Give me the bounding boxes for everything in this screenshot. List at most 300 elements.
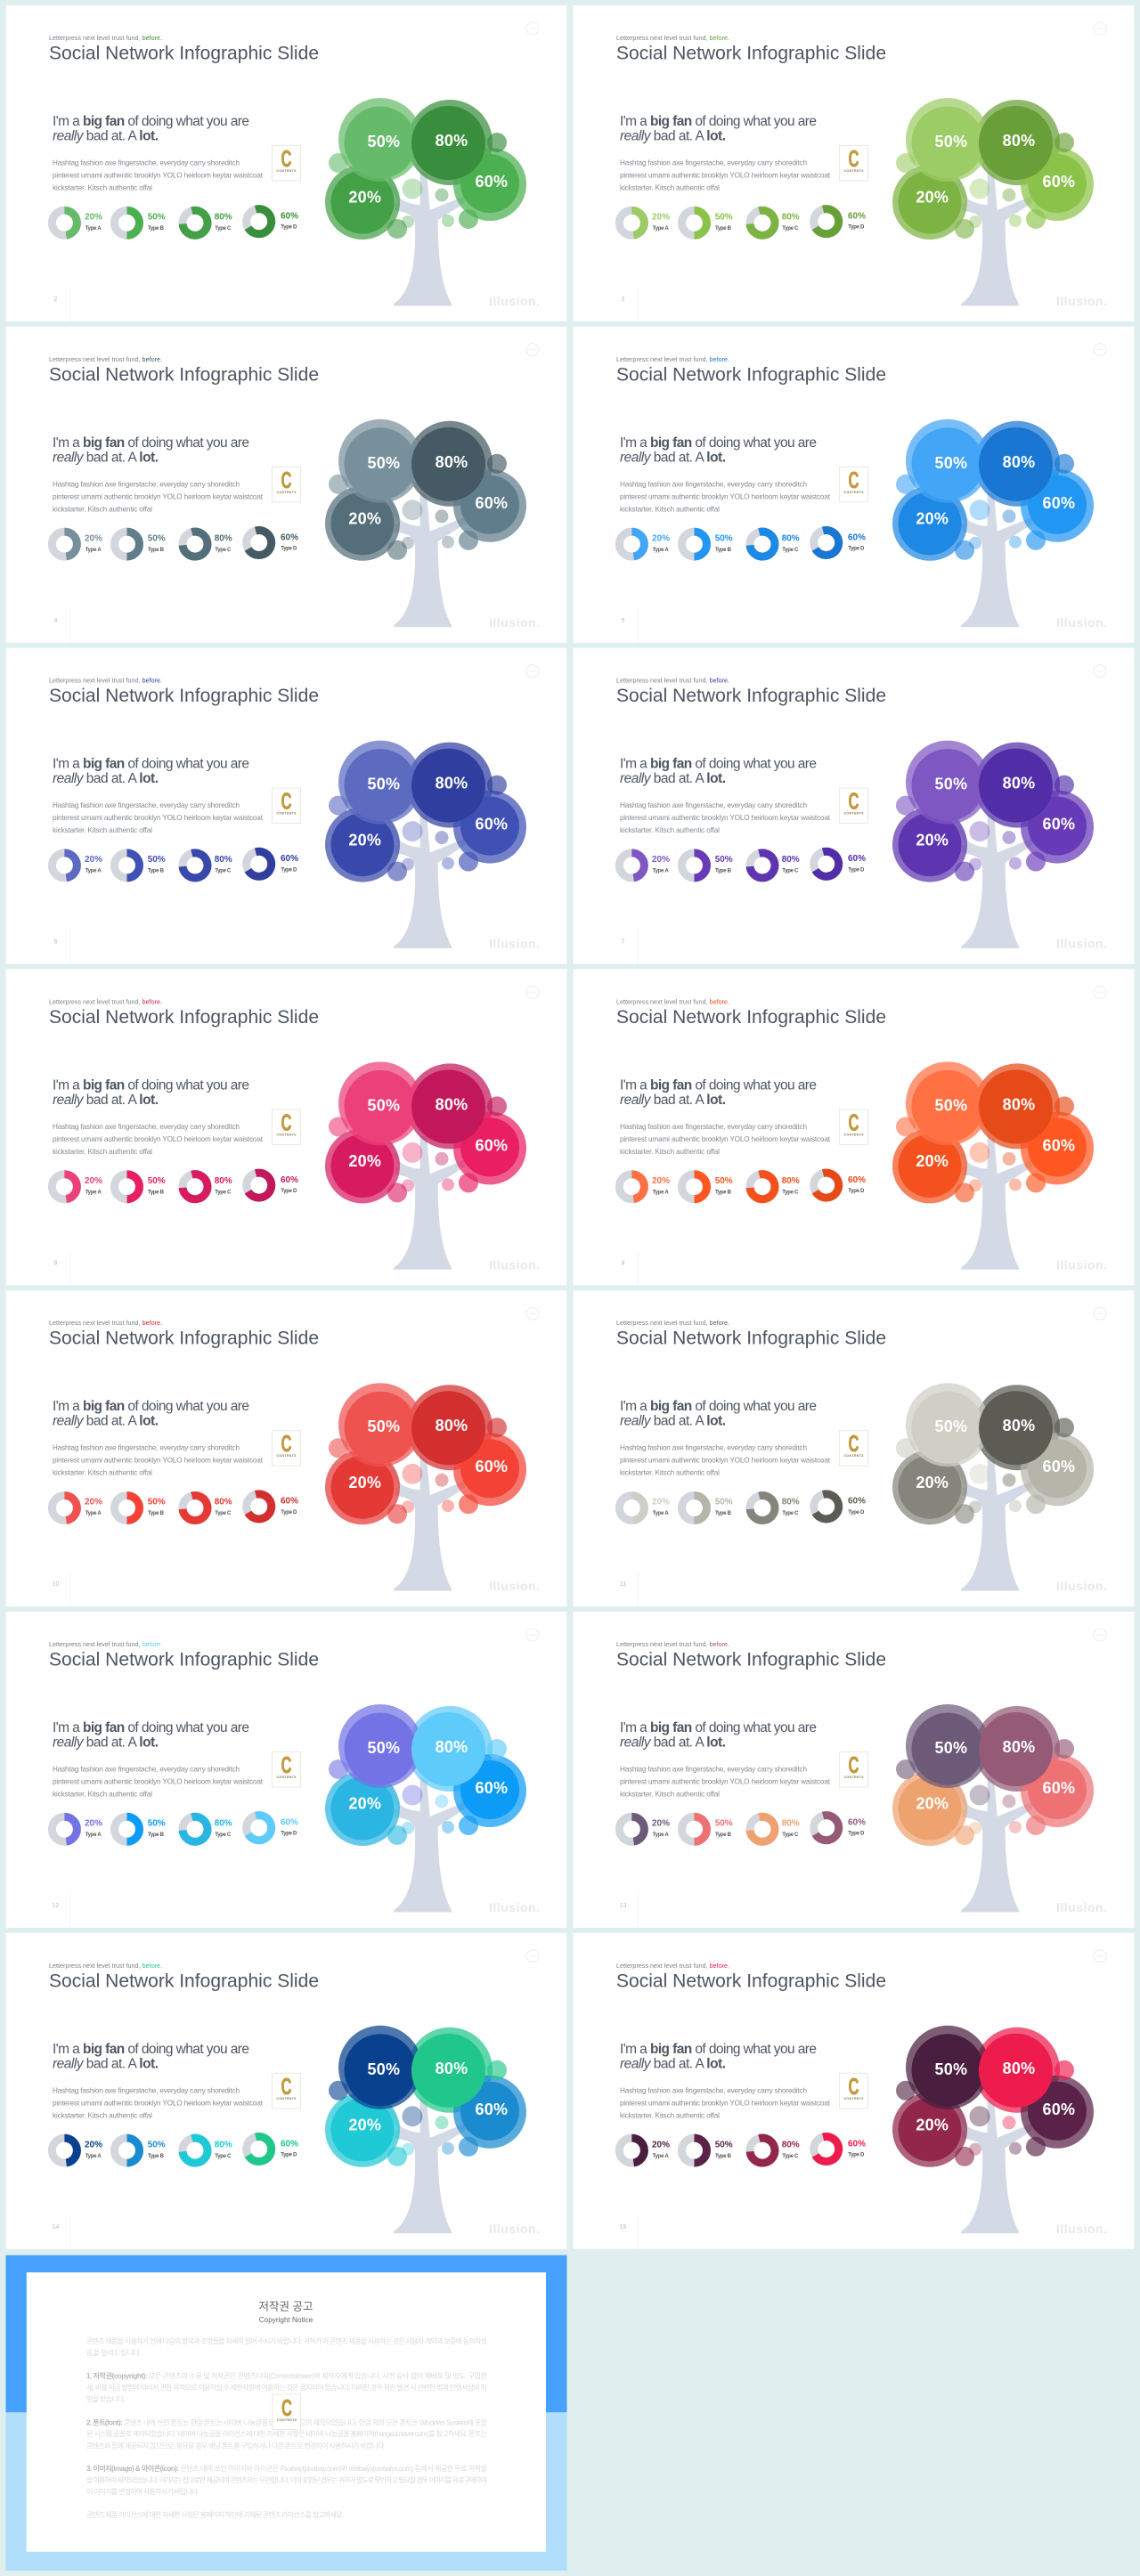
legend: type C: Type C (782, 869, 799, 874)
legend: type A: Type A (653, 1832, 669, 1838)
legend: type D: Type D (848, 2153, 865, 2158)
body text (620, 1123, 831, 1156)
body text: kickstarter. Kitsch authentic offal (620, 183, 720, 192)
headline (53, 114, 249, 144)
circle values: 20% (348, 1474, 381, 1491)
circle values: 50% (935, 454, 967, 472)
title: Social Network Infographic Slide (49, 1971, 319, 1991)
logo: CONTENTS (844, 169, 864, 173)
headline: I'm a big fan of doing what you are (53, 435, 249, 451)
legend: type A (652, 1818, 670, 1838)
body text: Hashtag fashion axe fingerstache, everyday carry shoreditch (53, 801, 240, 809)
body text (620, 1765, 831, 1799)
circle values: 50% (367, 776, 400, 793)
body text: kickstarter. Kitsch authentic offal (620, 1469, 720, 1477)
circle values: 50% (367, 1096, 400, 1114)
logo: CONTENTS (276, 812, 297, 816)
title: Social Network Infographic Slide (616, 1971, 886, 1991)
legend: type A: Type A (653, 2154, 669, 2159)
body text: Hashtag fashion axe fingerstache, everyday carry shoreditch (53, 1444, 240, 1452)
donut charts (619, 1173, 839, 1199)
body text: pinterest umami authentic brooklyn YOLO heirloom keytar waistcoat (620, 2099, 831, 2107)
slide 6: indigo (5, 648, 566, 964)
legend: type C: Type C (782, 226, 799, 232)
donut charts (619, 1494, 839, 1521)
body text: pinterest umami authentic brooklyn YOLO heirloom keytar waistcoat (53, 492, 264, 500)
logo: CONTENTS (277, 2418, 297, 2422)
circle values: 20% (348, 1152, 381, 1170)
headline (53, 1720, 249, 1751)
legend: type D: 60% (848, 1175, 866, 1185)
logo: C (281, 788, 292, 815)
logo: C (848, 2073, 859, 2100)
title: Social Network Infographic Slide (616, 1007, 886, 1028)
legend: type C: 80% (215, 533, 232, 543)
circle values: 60% (1042, 1779, 1075, 1797)
legend: type B: Type B (148, 226, 165, 232)
body text: pinterest umami authentic brooklyn YOLO heirloom keytar waistcoat (620, 814, 831, 822)
page number: 6 (54, 939, 58, 946)
panel background (5, 5, 566, 321)
panel background (5, 1612, 566, 1928)
title: Social Network Infographic Slide (49, 1007, 319, 1028)
circle values: 60% (1042, 816, 1075, 833)
eyebrow text: Letterpress next level trust fund, before. (49, 355, 162, 363)
circle values (348, 2060, 508, 2133)
intro paragraph (86, 2336, 488, 2357)
headline: really bad at. A lot. (53, 2056, 159, 2071)
legend: type A: 20% (652, 1498, 670, 1507)
circle values (348, 453, 508, 527)
intro paragraph: 음을 알려드립니다. (86, 2348, 142, 2357)
donut charts (52, 1173, 272, 1199)
body text: pinterest umami authentic brooklyn YOLO heirloom keytar waistcoat (620, 171, 831, 180)
legend: type B (148, 1176, 166, 1195)
legend: type D (281, 532, 298, 552)
legend: type B (148, 533, 166, 553)
logo: CONTENTS (276, 1133, 297, 1136)
legend: type B: 50% (715, 855, 733, 865)
legend: type C: 80% (782, 1176, 800, 1186)
panel background (5, 648, 566, 964)
eyebrow text: Letterpress next level trust fund, before. (616, 1640, 729, 1648)
slide 8: pink (5, 969, 566, 1285)
page number: 12 (53, 1903, 59, 1909)
legend: type D (848, 532, 866, 552)
body text: Hashtag fashion axe fingerstache, everyday carry shoreditch (53, 480, 240, 488)
legend: type C (782, 1176, 800, 1195)
brand mark: Illusion. (1056, 2222, 1107, 2236)
legend: type C: Type C (215, 2154, 232, 2159)
legend: type C: Type C (215, 1832, 232, 1838)
tree with circles (892, 1061, 1094, 1270)
brand mark: Illusion. (1056, 1579, 1107, 1593)
legend: type B (715, 1176, 733, 1195)
legend: type C: 80% (782, 212, 800, 223)
legend: type A: 20% (85, 855, 102, 865)
icon: chat bubble (526, 344, 539, 356)
icon: chat bubble (1094, 1629, 1106, 1641)
circle values: 60% (476, 816, 508, 833)
legend: type D: 60% (281, 1175, 298, 1185)
legend: type A: 20% (85, 212, 102, 223)
legend: type A: Type A (86, 1832, 102, 1838)
circle values: 80% (436, 453, 468, 471)
legend: type D (848, 1818, 866, 1837)
title: Social Network Infographic Slide (49, 686, 319, 706)
page number: 15 (620, 2224, 626, 2231)
brand mark: Illusion. (1056, 615, 1107, 630)
brand mark: Illusion. (489, 1579, 540, 1593)
notice heading: 저작권 공고 (259, 2301, 313, 2313)
eyebrow text: Letterpress next level trust fund, before. (616, 1962, 729, 1970)
legend: type C: 80% (782, 1498, 800, 1507)
legend: type C (215, 1176, 232, 1195)
body text: Hashtag fashion axe fingerstache, everyday carry shoreditch (53, 158, 240, 167)
legend: type C: Type C (782, 1511, 799, 1516)
legend: type C: 80% (215, 1498, 232, 1507)
eyebrow text: Letterpress next level trust fund, before. (616, 677, 729, 685)
legend: type A (652, 2140, 670, 2159)
circle values: 80% (436, 132, 468, 150)
headline: I'm a big fan of doing what you are (620, 757, 817, 772)
legend: type A: 20% (85, 1498, 102, 1507)
circle values: 50% (367, 2060, 400, 2078)
legend: type C (215, 2140, 232, 2159)
icon: chat bubble (526, 1307, 539, 1320)
legend: type D: Type D (281, 1832, 297, 1837)
headline: I'm a big fan of doing what you are (620, 435, 817, 451)
circle values: 50% (935, 133, 967, 150)
brand mark: Illusion. (1056, 1257, 1107, 1272)
icon: chat bubble (1094, 344, 1106, 356)
headline (620, 435, 817, 465)
legend: type B (715, 533, 733, 553)
legend: type D (848, 2139, 866, 2158)
body text: kickstarter. Kitsch authentic offal (620, 505, 720, 513)
clause 2: font: 콘텐츠와 함께 제공되지 않으므로, 필요할 경우 해당 폰트를 구입하거나 다른 폰트로 변경하여 사용하시기 바랍니다. (86, 2442, 386, 2450)
legend: type B: 50% (715, 533, 733, 543)
legend: type C: Type C (215, 869, 232, 874)
body text (620, 480, 831, 513)
eyebrow text: Letterpress next level trust fund, before. (49, 1319, 162, 1327)
legend: type D: 60% (281, 854, 298, 864)
legend: type B: 50% (715, 212, 733, 223)
body text: kickstarter. Kitsch authentic offal (620, 826, 720, 834)
circle values: 60% (476, 1136, 508, 1154)
circle values: 80% (436, 775, 468, 792)
legend: type D: 60% (281, 212, 298, 221)
body text: kickstarter. Kitsch authentic offal (620, 1790, 720, 1799)
body text (53, 1444, 264, 1477)
tree with circles (892, 1704, 1094, 1912)
body text: Hashtag fashion axe fingerstache, everyday carry shoreditch (620, 158, 807, 167)
legend: type C: Type C (215, 548, 232, 553)
panel background (5, 1290, 566, 1606)
legend: type A (652, 855, 670, 874)
panel background (574, 648, 1135, 964)
logo: CONTENTS (844, 2097, 864, 2101)
headline: I'm a big fan of doing what you are (620, 2042, 817, 2057)
body text: Hashtag fashion axe fingerstache, everyday carry shoreditch (620, 801, 807, 809)
brand mark: Illusion. (1056, 937, 1107, 951)
headline (620, 757, 817, 786)
panel background (574, 969, 1135, 1285)
circle values: 80% (436, 1738, 468, 1756)
notice subheading: Copyright Notice (259, 2316, 314, 2324)
body text (53, 480, 264, 513)
body text (53, 2086, 264, 2119)
logo: CONTENTS (276, 2097, 297, 2101)
legend: type C: 80% (215, 2140, 232, 2149)
body text (53, 801, 264, 834)
legend: type B: Type B (148, 1832, 165, 1838)
logo: CONTENTS (844, 1776, 864, 1779)
donut charts (619, 209, 839, 235)
headline: really bad at. A lot. (53, 1414, 159, 1429)
brand mark: Illusion. (489, 294, 540, 308)
legend: type B (715, 212, 733, 232)
legend: type A: 20% (85, 1818, 102, 1829)
headline (620, 2042, 817, 2071)
circle values: 60% (1042, 494, 1075, 512)
donut charts (52, 851, 272, 878)
tree with circles (892, 2026, 1094, 2233)
body text: pinterest umami authentic brooklyn YOLO heirloom keytar waistcoat (53, 1777, 264, 1786)
clause 2: font: 된 시스템 글꼴로 제작되었습니다. 네이버 나눔글꼴 라이선스에 대한 자세한 사항은 네이버 나눔글꼴 홈페이지(hangeul.naver.com)를 참고하세요. 폰트는 (86, 2429, 487, 2438)
legend: type A: 20% (652, 533, 670, 543)
logo: C (281, 145, 292, 172)
legend: type C: Type C (215, 1190, 232, 1195)
icon: chat bubble (1094, 1950, 1106, 1962)
clause 1: copyright: 세, 비용 지급 방법에 따라서 권한 목적으로 이용하실 수 제한사항에 이용하는 것은 금지되어 있습니다. 이러한 경우 위반 발견 시 관련한 법과 민형사상의 처 (86, 2383, 487, 2392)
legend: type C (215, 533, 232, 553)
logo: C (281, 1751, 292, 1778)
panel background (574, 5, 1135, 321)
logo: C (848, 1430, 859, 1457)
logo: C (281, 2394, 292, 2421)
headline: really bad at. A lot. (620, 771, 726, 786)
circle values: 80% (1003, 1417, 1035, 1434)
panel: copyright notice (5, 2255, 566, 2571)
legend: type B: 50% (148, 1176, 166, 1186)
legend: type D: Type D (848, 225, 865, 231)
eyebrow text: Letterpress next level trust fund, before. (49, 34, 162, 42)
body text: pinterest umami authentic brooklyn YOLO heirloom keytar waistcoat (620, 1135, 831, 1143)
panel background (5, 969, 566, 1285)
logo (839, 2073, 867, 2109)
circle values: 20% (916, 831, 949, 849)
logo: C (848, 467, 859, 493)
headline: I'm a big fan of doing what you are (53, 2042, 249, 2057)
donut charts (619, 851, 839, 878)
slide 10: red (5, 1290, 566, 1606)
legend: type A (85, 855, 102, 874)
headline (620, 114, 817, 144)
legend: type A (652, 1176, 670, 1195)
donut charts (52, 1494, 272, 1521)
legend: type C (215, 1498, 232, 1516)
legend: type D (281, 1497, 298, 1516)
circle values: 60% (1042, 2101, 1075, 2118)
clause 1: copyright (86, 2371, 488, 2403)
slide 4: blue grey (5, 327, 566, 643)
legend: type D (281, 212, 298, 231)
circle values: 20% (916, 509, 949, 527)
circle values (916, 132, 1075, 207)
body text: pinterest umami authentic brooklyn YOLO heirloom keytar waistcoat (53, 1135, 264, 1143)
brand mark: Illusion. (1056, 294, 1107, 308)
logo (273, 145, 301, 181)
blue upper band (5, 2255, 566, 2412)
legend: type A: Type A (653, 869, 669, 874)
circle values: 60% (1042, 173, 1075, 191)
headline: really bad at. A lot. (620, 1414, 726, 1429)
legend: type D: Type D (281, 1510, 297, 1516)
body text: Hashtag fashion axe fingerstache, everyday carry shoreditch (53, 1123, 240, 1131)
headline: really bad at. A lot. (620, 2056, 726, 2071)
headline (53, 1399, 249, 1429)
logo: C (848, 1751, 859, 1778)
legend: type B: Type B (148, 1511, 165, 1516)
headline (620, 1077, 817, 1108)
page number: 7 (622, 939, 625, 946)
logo: CONTENTS (276, 1776, 297, 1779)
legend: type A: Type A (653, 1511, 669, 1516)
circle values: 50% (935, 776, 967, 793)
circle values: 50% (935, 1418, 967, 1435)
legend: type A: Type A (86, 226, 102, 232)
legend: type B (148, 1498, 166, 1516)
logo: C (281, 467, 292, 493)
legend: type B (148, 212, 166, 232)
body text: Hashtag fashion axe fingerstache, everyday carry shoreditch (620, 1444, 807, 1452)
legend: type C: Type C (782, 1832, 799, 1838)
logo (273, 2073, 301, 2109)
tree with circles (892, 1383, 1094, 1591)
brand mark: Illusion. (489, 615, 540, 630)
legend: type A (652, 212, 670, 232)
circle values: 60% (476, 2101, 508, 2118)
donut charts (52, 1816, 272, 1841)
legend: type B (715, 855, 733, 874)
legend: type D: 60% (848, 532, 866, 542)
circle values: 20% (348, 831, 381, 849)
circle values (348, 1417, 508, 1491)
headline: I'm a big fan of doing what you are (53, 1720, 249, 1735)
legend: type B: 50% (715, 1498, 733, 1507)
logo: CONTENTS (276, 1454, 297, 1458)
clause 3: image and icon: 3. 이미지(image) & 아이콘(icon): 콘텐츠 내에 쓰인 이미지와 아이콘은 Pixabay(pixabay.com)와 Webalys(webalys.com) 등에서 제공한 무료 저작물 (86, 2464, 487, 2473)
clause 2: font: 2. 폰트(font): 콘텐츠 내에 쓰인 폰트는 한글 폰트는 네이버 나눔글꼴로 제작되었으며 제작되었습니다. 한글 외의 모든 폰트는 Windows System에 포함 (86, 2418, 488, 2427)
clause 3: image and icon: 이 이미지를 변경하여 사용하시기 바랍니다. (86, 2487, 200, 2496)
headline: really bad at. A lot. (53, 1093, 159, 1108)
body text (53, 158, 264, 192)
legend: type B: 50% (148, 855, 166, 865)
legend: type B: Type B (715, 1511, 732, 1516)
headline: I'm a big fan of doing what you are (53, 114, 249, 129)
circle values: 50% (935, 2060, 967, 2078)
logo: C (848, 788, 859, 815)
legend: type A (85, 1498, 102, 1516)
headline: I'm a big fan of doing what you are (620, 1720, 817, 1735)
eyebrow text: Letterpress next level trust fund, before. (49, 677, 162, 685)
panel background (574, 1933, 1135, 2249)
slide 5: blue (574, 327, 1135, 643)
slide 15: aubergine and crimson (574, 1933, 1135, 2249)
circle values: 50% (935, 1096, 967, 1114)
legend: type B: Type B (148, 2154, 165, 2159)
legend: type C (215, 212, 232, 232)
title: Social Network Infographic Slide (616, 1649, 886, 1670)
tree with circles (325, 1704, 526, 1912)
eyebrow text: Letterpress next level trust fund, before. (49, 1962, 162, 1970)
slide 11: warm grey (574, 1290, 1135, 1606)
legend: type D (848, 1175, 866, 1194)
circle values: 80% (1003, 132, 1035, 150)
legend: type D: Type D (281, 1189, 297, 1194)
circle values (348, 1738, 508, 1813)
icon: chat bubble (526, 665, 539, 678)
legend: type C (782, 2140, 800, 2159)
icon: chat bubble (1094, 665, 1106, 678)
logo: CONTENTS (276, 169, 297, 173)
logo (839, 1430, 867, 1466)
headline: really bad at. A lot. (53, 771, 159, 786)
legend: type C: Type C (782, 2154, 799, 2159)
circle values (916, 775, 1075, 849)
circle values: 20% (916, 1152, 949, 1170)
slide 3: light green (574, 5, 1135, 321)
legend: type A: 20% (652, 855, 670, 865)
legend: type B (148, 2140, 166, 2159)
circle values (916, 2060, 1075, 2133)
headline (620, 1399, 817, 1429)
panel background (574, 1612, 1135, 1928)
body text: kickstarter. Kitsch authentic offal (53, 2111, 152, 2119)
legend: type D: Type D (281, 225, 297, 231)
slide 7: deep purple (574, 648, 1135, 964)
donut charts (619, 531, 839, 557)
legend: type C (782, 1498, 800, 1516)
eyebrow text: Letterpress next level trust fund, before. (616, 34, 729, 42)
tree with circles (325, 741, 526, 948)
body text: kickstarter. Kitsch authentic offal (53, 505, 152, 513)
title: Social Network Infographic Slide (616, 686, 886, 706)
legend: type D (848, 212, 866, 231)
clause 1: copyright: 1. 저작권(copyright): 모든 콘텐츠의 소유 및 저작권은 콘텐츠타워(Contentstower)와 제작자에게 있습니다. 사전 승낙 없이 재배포 및 양도, 구입한 (86, 2371, 488, 2380)
legend: type B: 50% (715, 2140, 733, 2149)
legend: type A: Type A (86, 869, 102, 874)
legend: type A (85, 212, 102, 232)
legend: type C: Type C (215, 226, 232, 232)
body text: kickstarter. Kitsch authentic offal (53, 1469, 152, 1477)
tree with circles (892, 741, 1094, 948)
brand mark: Illusion. (489, 2222, 540, 2236)
circle values: 80% (1003, 453, 1035, 471)
legend: type B: Type B (715, 2154, 732, 2159)
logo: CONTENTS (276, 491, 297, 494)
icon: chat bubble (526, 986, 539, 998)
logo: C (848, 145, 859, 172)
body text: Hashtag fashion axe fingerstache, everyday carry shoreditch (53, 1765, 240, 1774)
brand mark: Illusion. (489, 1257, 540, 1272)
legend: type A: 20% (652, 2140, 670, 2149)
legend: type A (85, 2140, 102, 2159)
legend: type A: 20% (652, 212, 670, 223)
circle values: 20% (916, 1474, 949, 1491)
circle values: 60% (476, 494, 508, 512)
